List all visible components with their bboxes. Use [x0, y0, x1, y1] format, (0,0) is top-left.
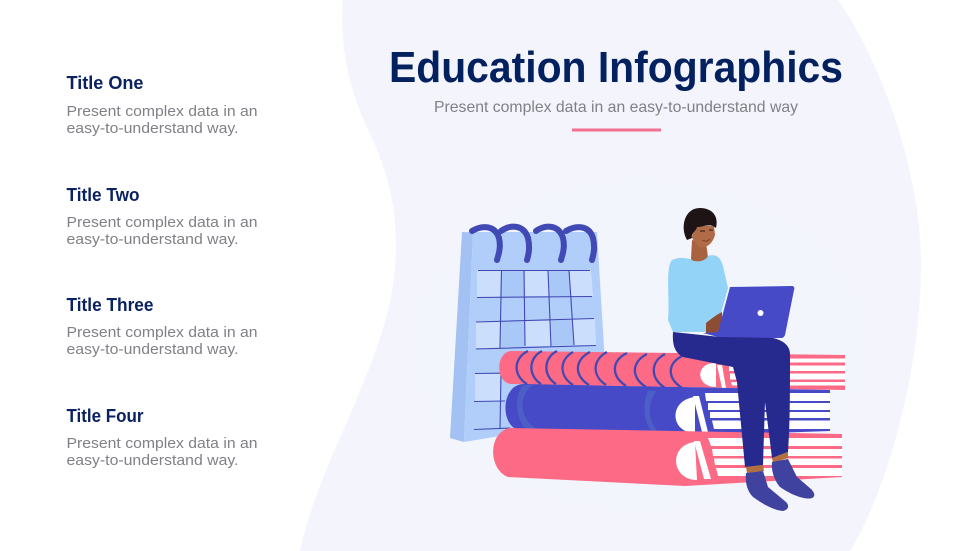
item: title two: easy-to-understand way.	[66, 231, 239, 248]
neck	[691, 240, 708, 263]
item: title four: easy-to-understand way.	[66, 452, 239, 469]
sweater	[668, 255, 728, 332]
item: title one: easy-to-understand way.	[66, 120, 239, 137]
item: title four	[66, 405, 258, 469]
socks	[746, 459, 814, 511]
calendar rings	[472, 227, 594, 260]
background blob	[300, 0, 921, 551]
hand	[706, 312, 722, 333]
person on laptop	[668, 208, 814, 511]
item: title three	[66, 294, 258, 358]
item: title three: easy-to-understand way.	[66, 341, 239, 358]
item: title two: Present complex data in an	[66, 214, 258, 231]
item: title four: Present complex data in an	[66, 435, 258, 452]
item: title four: Title Four	[66, 405, 144, 426]
subtitle: Present complex data in an easy-to-understand way	[434, 99, 798, 116]
item: title three: Title Three	[66, 294, 154, 315]
item: title three: Present complex data in an	[66, 324, 258, 341]
item: title one: Present complex data in an	[66, 103, 258, 120]
item: title one	[66, 72, 258, 137]
laptop	[703, 286, 794, 338]
icon: calendar	[450, 227, 606, 442]
item: title two	[66, 184, 258, 248]
item: title two: Title Two	[66, 184, 140, 205]
icon: bottom pink book	[493, 428, 842, 486]
illustration backdrop	[415, 180, 865, 510]
icon: blue book	[505, 384, 830, 437]
book spiral	[517, 351, 682, 388]
head and hair	[684, 208, 717, 247]
item: title one: Title One	[66, 72, 144, 93]
title: Education Infographics	[389, 43, 843, 92]
accent line	[572, 128, 661, 132]
legs	[673, 332, 790, 473]
icon: top pink book	[499, 351, 845, 390]
